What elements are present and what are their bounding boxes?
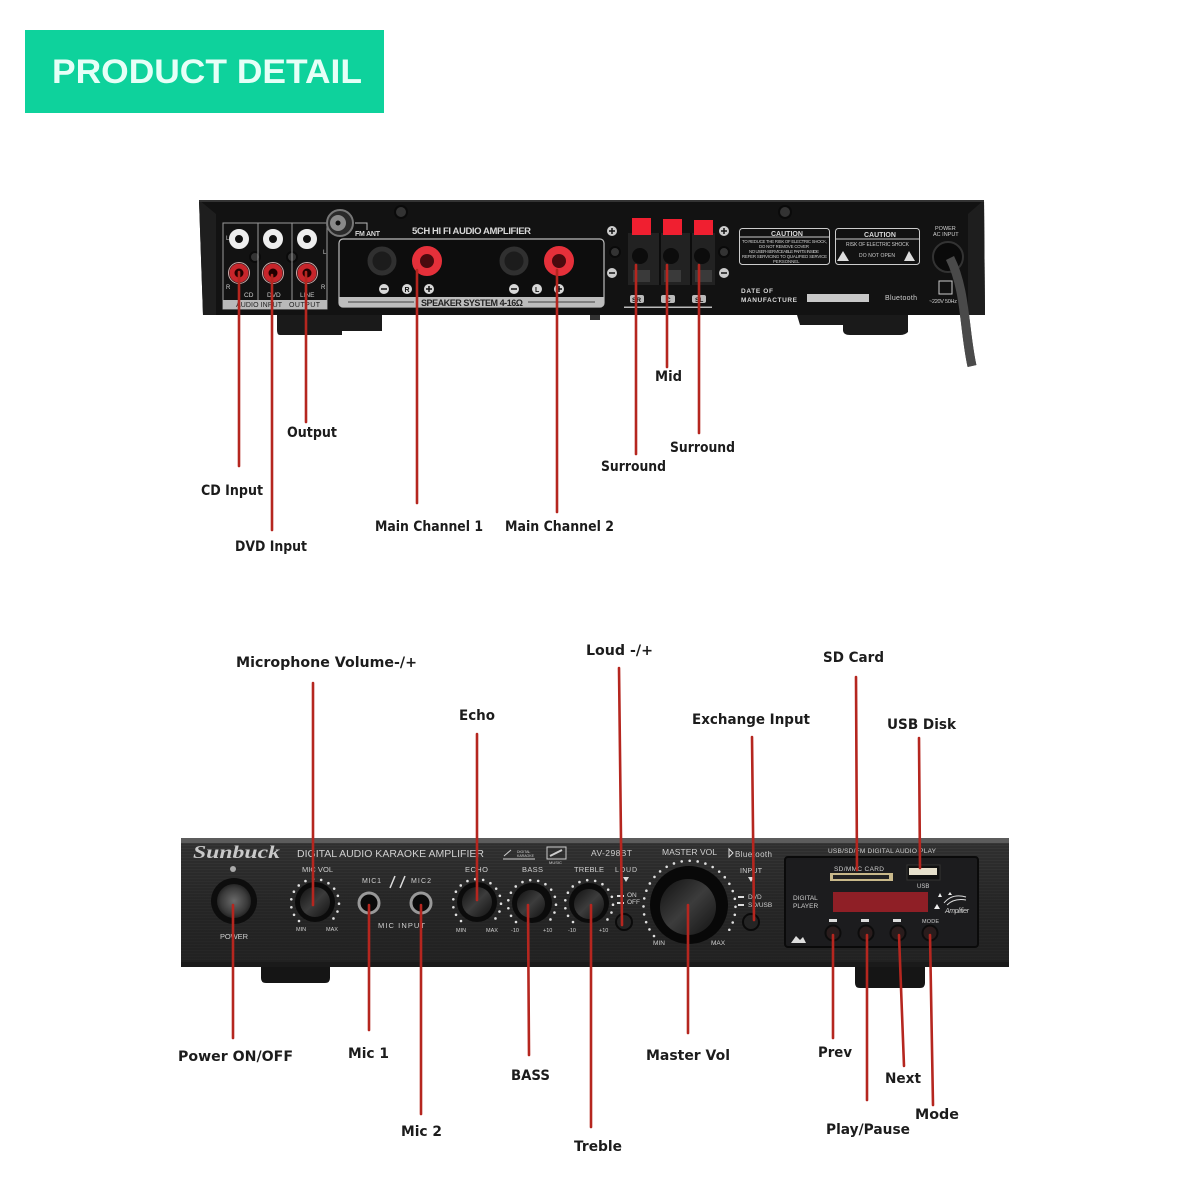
rear feet	[277, 315, 908, 335]
caution labels: DO NOT REMOVE COVER	[759, 244, 809, 249]
knob: mic vol	[291, 865, 339, 933]
panel: audio input/output RCA jacks: CD	[244, 292, 254, 299]
rear callout lines	[239, 265, 699, 530]
rear callout labels: Main Channel 1	[375, 519, 483, 535]
rear callout labels: Surround	[601, 459, 666, 475]
panel: digital player: DIGITAL	[793, 895, 818, 902]
power socket: POWER	[935, 226, 956, 232]
caution labels: REFER SERVICING TO QUALIFIED SERVICE	[742, 254, 827, 259]
front callout labels: Play/Pause	[826, 1122, 910, 1138]
front callout labels: Mic 2	[401, 1124, 442, 1140]
front callout labels: Mode	[915, 1107, 959, 1123]
mic jacks: MIC INPUT	[378, 921, 425, 930]
knob: bass	[508, 865, 556, 934]
panel: audio input/output RCA jacks: LINE	[300, 292, 315, 299]
brand and model text: KARAOKE	[517, 854, 535, 858]
knob: master volume	[644, 847, 736, 947]
caution labels: PERSONNEL	[773, 259, 800, 264]
FM antenna connector	[327, 210, 381, 238]
rear callout labels: Surround	[670, 440, 735, 456]
knob: echo: ECHO	[465, 865, 488, 874]
front callout labels: Echo	[459, 708, 495, 724]
knob: mic vol: MAX	[326, 927, 338, 933]
power socket: AC INPUT	[933, 232, 959, 238]
sd card slot: SD/MMC CARD	[834, 866, 884, 873]
brand and model text	[193, 842, 632, 865]
panel: main speaker binding posts	[339, 239, 604, 308]
front callout lines	[233, 668, 933, 1127]
front callout labels	[178, 643, 959, 1155]
power cable	[950, 258, 972, 366]
knob: treble: +10	[599, 928, 608, 934]
caution labels: RISK OF ELECTRIC SHOCK	[846, 242, 910, 248]
input selector: Bluetooth	[735, 850, 772, 859]
front callout labels: BASS	[511, 1068, 550, 1084]
title banner	[25, 30, 384, 113]
brand and model text: MUSIC	[549, 860, 562, 865]
front callout labels: SD Card	[823, 650, 884, 666]
mic jacks: MIC2	[411, 878, 431, 885]
input selector: SD/USB	[748, 902, 772, 909]
panel: audio input/output RCA jacks: L	[323, 250, 327, 256]
sd card slot	[830, 866, 893, 881]
usb port	[907, 865, 940, 890]
front callout labels: Power ON/OFF	[178, 1049, 293, 1065]
front callout labels: Prev	[818, 1045, 852, 1061]
front chassis	[181, 838, 1009, 967]
button: loud: OFF	[627, 899, 640, 906]
button: loud: ON	[627, 892, 637, 899]
panel: main speaker binding posts: SPEAKER SYSTEM 4-16Ω	[421, 298, 523, 308]
player buttons	[826, 919, 939, 940]
FM antenna connector: FM ANT	[355, 231, 381, 238]
panel: main speaker binding posts: R	[404, 287, 410, 294]
power button: POWER	[220, 932, 249, 941]
player buttons: MODE	[922, 919, 939, 925]
input selector	[729, 849, 772, 930]
panel: surround and mid terminals: SL	[695, 297, 703, 304]
knob: master volume: MIN	[653, 940, 665, 947]
usb port: USB	[917, 884, 929, 890]
rear chassis	[199, 200, 985, 315]
amplifier logo: Amplifier	[944, 908, 970, 915]
panel: audio input/output RCA jacks	[223, 223, 327, 309]
amplifier logo	[934, 892, 970, 915]
bluetooth text: Bluetooth	[885, 295, 917, 302]
front panel amplifier photo	[181, 838, 1009, 988]
led display	[833, 892, 928, 912]
caution labels: NO USER-SERVICEABLE PARTS INSIDE	[749, 249, 819, 254]
front callout labels: USB Disk	[887, 717, 957, 733]
knob: mic vol: MIN	[296, 927, 306, 933]
date of manufacture: MANUFACTURE	[741, 297, 798, 304]
knob: mic vol: MIC VOL	[302, 865, 333, 874]
rear callout labels: Main Channel 2	[505, 519, 614, 535]
caution labels: DO NOT OPEN	[859, 253, 895, 259]
rear callout labels: Mid	[655, 369, 682, 385]
panel: audio input/output RCA jacks: L	[226, 236, 230, 242]
power socket	[929, 226, 972, 366]
input selector: DVD	[748, 894, 762, 901]
power button	[211, 866, 257, 941]
button: loud: LOUD	[615, 867, 637, 874]
input selector: INPUT	[740, 868, 763, 875]
knob: bass: +10	[543, 928, 552, 934]
caution labels: CAUTION	[864, 232, 896, 239]
caution labels	[740, 228, 920, 264]
mic jacks: MIC1	[362, 878, 381, 885]
title banner: PRODUCT DETAIL	[52, 53, 362, 91]
front callout labels: Loud -/+	[586, 643, 653, 659]
button: loud	[615, 867, 640, 930]
front callout labels: Exchange Input	[692, 712, 810, 728]
rear callout labels: DVD Input	[235, 539, 307, 555]
caution labels: TO REDUCE THE RISK OF ELECTRIC SHOCK,	[742, 239, 827, 244]
knob: treble	[565, 865, 613, 934]
date of manufacture: DATE OF	[741, 288, 773, 295]
heading: 5CH amplifier: 5CH HI FI AUDIO AMPLIFIER	[412, 226, 531, 237]
knob: master volume: MASTER VOL	[662, 847, 717, 857]
panel: digital player	[785, 848, 978, 947]
brand and model text: Sunbuck	[193, 842, 280, 862]
rear callout labels	[201, 369, 735, 555]
rear callout labels: Output	[287, 425, 337, 441]
knob: master volume: MAX	[711, 940, 726, 947]
panel: surround and mid terminals	[607, 218, 729, 308]
panel: surround and mid terminals: C	[666, 297, 671, 304]
panel: audio input/output RCA jacks: AUDIO INPUT	[236, 302, 283, 309]
front callout labels: Treble	[574, 1139, 622, 1155]
brand and model text: DIGITAL	[517, 850, 530, 854]
brand and model text: AV-298BT	[591, 848, 632, 858]
caution labels: CAUTION	[771, 231, 803, 238]
panel: digital player: PLAYER	[793, 903, 818, 910]
panel: surround and mid terminals: SR	[632, 297, 641, 304]
front callout labels: Microphone Volume-/+	[236, 655, 417, 671]
front callout labels: Mic 1	[348, 1046, 389, 1062]
screws	[250, 206, 791, 265]
knob: echo	[453, 865, 501, 934]
rear callout labels: CD Input	[201, 483, 263, 499]
knob: bass: -10	[511, 928, 519, 934]
rear panel amplifier photo	[199, 200, 985, 366]
panel: audio input/output RCA jacks: R	[226, 285, 231, 291]
power socket: ~220V 50Hz	[929, 299, 957, 305]
panel: audio input/output RCA jacks: DVD	[267, 292, 281, 299]
knob: treble: -10	[568, 928, 576, 934]
panel: main speaker binding posts: L	[535, 287, 540, 294]
front feet	[261, 962, 925, 988]
knob: bass: BASS	[522, 865, 543, 874]
knob: treble: TREBLE	[574, 865, 604, 874]
front callout labels: Master Vol	[646, 1048, 730, 1064]
mic jacks	[359, 876, 431, 930]
panel: audio input/output RCA jacks: OUTPUT	[289, 302, 321, 309]
panel: digital player: USB/SD/FM DIGITAL AUDIO PLAY	[828, 848, 937, 855]
knob: echo: MIN	[456, 928, 466, 934]
front callout labels: Next	[885, 1071, 921, 1087]
panel: audio input/output RCA jacks: R	[321, 285, 326, 291]
date of manufacture	[741, 288, 869, 304]
brand and model text: DIGITAL AUDIO KARAOKE AMPLIFIER	[297, 848, 484, 860]
knob: echo: MAX	[486, 928, 498, 934]
